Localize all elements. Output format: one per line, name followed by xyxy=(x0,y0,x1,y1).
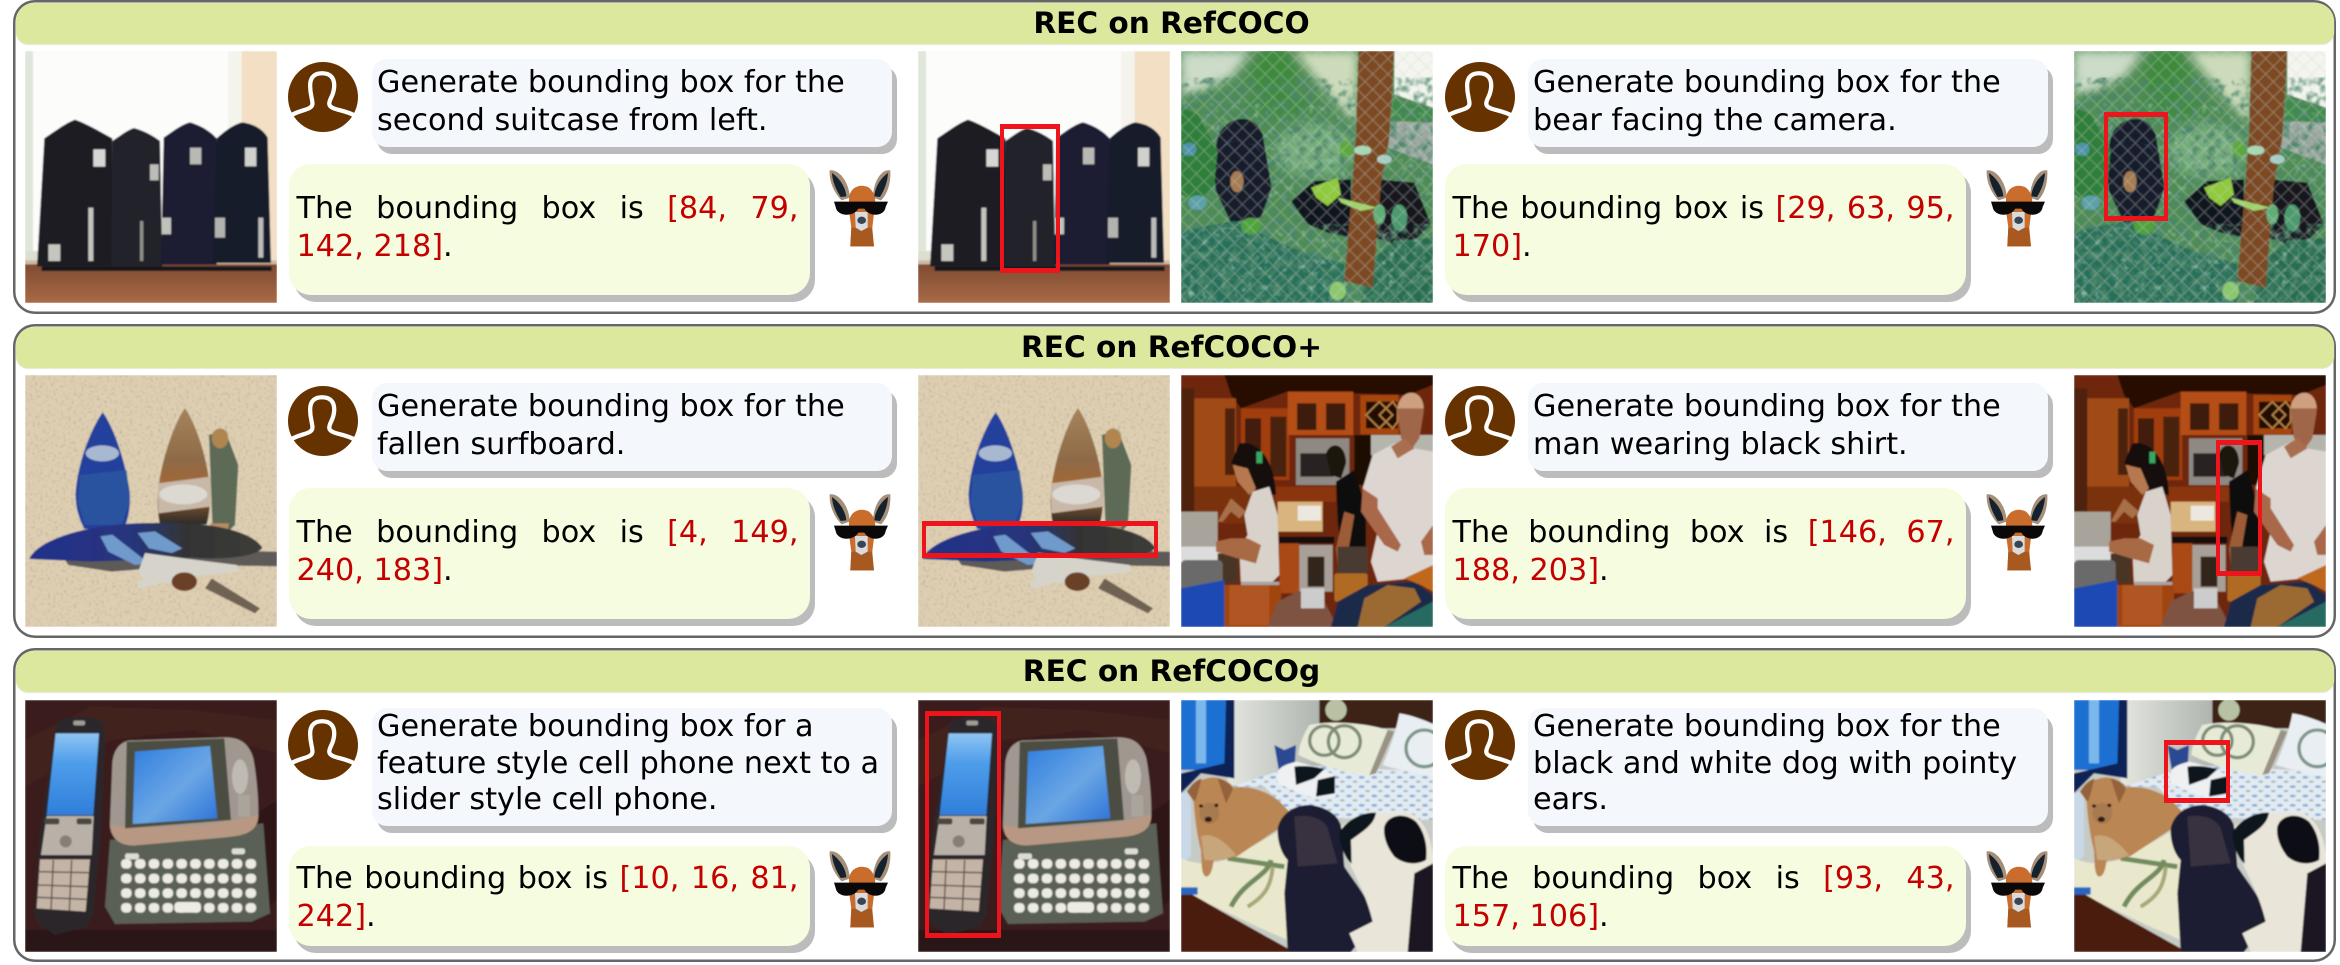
user prompt bubble: Generate bounding box for a xyxy=(377,709,814,744)
assistant answer bubble: 188, 203]. xyxy=(1452,553,1609,588)
heading: REC on RefCOCOg xyxy=(16,651,2334,692)
red bounding box: bear xyxy=(2104,112,2168,221)
user prompt bubble xyxy=(372,708,892,826)
heading: REC on RefCOCOg: REC on RefCOCOg xyxy=(1023,654,1320,688)
user prompt bubble: man wearing black shirt. xyxy=(1533,426,1908,462)
icon: llama with sunglasses xyxy=(830,170,890,246)
red bounding box: black and white dog xyxy=(2164,740,2230,803)
photo: bear result xyxy=(2074,51,2326,303)
panel: REC on RefCOCO xyxy=(13,0,2336,314)
user prompt bubble: Generate bounding box for the xyxy=(377,65,845,100)
user prompt bubble: second suitcase from left. xyxy=(377,102,767,138)
assistant answer bubble: 240, 183]. xyxy=(296,553,453,588)
photo: bear xyxy=(1181,51,1433,303)
red bounding box: feature phone xyxy=(925,711,1001,938)
user prompt bubble: Generate bounding box for the xyxy=(1533,389,2001,424)
icon: llama with sunglasses xyxy=(830,494,890,570)
icon: user avatar xyxy=(288,710,358,780)
user prompt bubble: Generate bounding box for the xyxy=(377,389,845,424)
icon: user avatar xyxy=(288,62,358,132)
assistant answer bubble xyxy=(1445,488,1966,619)
red bounding box: fallen surfboard xyxy=(922,521,1158,558)
photo: suitcases result xyxy=(918,51,1170,303)
user prompt bubble: feature style cell phone next to a xyxy=(377,746,879,781)
assistant answer bubble: The bounding box is [93, 43, xyxy=(1452,861,1954,896)
assistant answer bubble: The bounding box is [10, 16, 81, xyxy=(296,861,799,896)
panel: REC on RefCOCO+ xyxy=(13,324,2336,638)
red bounding box: man in black shirt xyxy=(2216,440,2262,576)
user prompt bubble: Generate bounding box for the xyxy=(1533,709,2001,744)
photo: two phones result xyxy=(918,700,1170,952)
heading: REC on RefCOCO+: REC on RefCOCO+ xyxy=(1021,330,1322,364)
photo: dogs result xyxy=(2074,700,2326,952)
icon: user avatar xyxy=(288,386,358,456)
heading: REC on RefCOCO: REC on RefCOCO xyxy=(1033,6,1310,40)
heading: REC on RefCOCO+ xyxy=(16,327,2334,368)
assistant answer bubble: 142, 218]. xyxy=(296,229,453,264)
assistant answer bubble xyxy=(1445,846,1966,946)
user prompt bubble xyxy=(372,383,892,471)
user prompt bubble: bear facing the camera. xyxy=(1533,102,1897,138)
icon: llama with sunglasses xyxy=(1986,494,2048,570)
icon: user avatar xyxy=(1445,386,1515,456)
assistant answer bubble xyxy=(1445,164,1966,295)
user prompt bubble xyxy=(372,59,892,147)
icon: user avatar xyxy=(1445,710,1515,780)
photo: suitcases xyxy=(25,51,277,303)
user prompt bubble xyxy=(1528,708,2048,826)
photo: beach result xyxy=(918,375,1170,627)
user prompt bubble: fallen surfboard. xyxy=(377,426,625,462)
assistant answer bubble xyxy=(289,846,810,946)
assistant answer bubble: 157, 106]. xyxy=(1452,899,1609,934)
icon: llama with sunglasses xyxy=(1986,170,2048,246)
assistant answer bubble xyxy=(289,488,810,619)
icon: user avatar xyxy=(1445,62,1515,132)
icon: llama with sunglasses xyxy=(1986,851,2048,928)
user prompt bubble: slider style cell phone. xyxy=(377,782,718,817)
assistant answer bubble: 170]. xyxy=(1452,229,1532,264)
user prompt bubble: Generate bounding box for the xyxy=(1533,65,2001,100)
heading: REC on RefCOCO xyxy=(16,3,2334,44)
assistant answer bubble: The bounding box is [84, 79, xyxy=(296,191,798,226)
icon: llama with sunglasses xyxy=(830,851,890,928)
user prompt bubble xyxy=(1528,383,2048,471)
photo: kitchen result xyxy=(2074,375,2326,627)
user prompt bubble: black and white dog with pointy xyxy=(1533,746,2017,781)
assistant answer bubble: 242]. xyxy=(296,899,376,934)
assistant answer bubble xyxy=(289,164,810,295)
photo: kitchen xyxy=(1181,375,1433,627)
photo: beach surfboards xyxy=(25,375,277,627)
user prompt bubble xyxy=(1528,59,2048,147)
panel: REC on RefCOCOg xyxy=(13,648,2336,962)
assistant answer bubble: The bounding box is [4, 149, xyxy=(296,515,798,550)
assistant answer bubble: The bounding box is [29, 63, 95, xyxy=(1452,191,1955,226)
photo: dogs on bed xyxy=(1181,700,1433,952)
photo: two phones xyxy=(25,700,277,952)
assistant answer bubble: The bounding box is [146, 67, xyxy=(1452,515,1954,550)
red bounding box: second suitcase xyxy=(1000,124,1060,273)
user prompt bubble: ears. xyxy=(1533,782,1608,817)
